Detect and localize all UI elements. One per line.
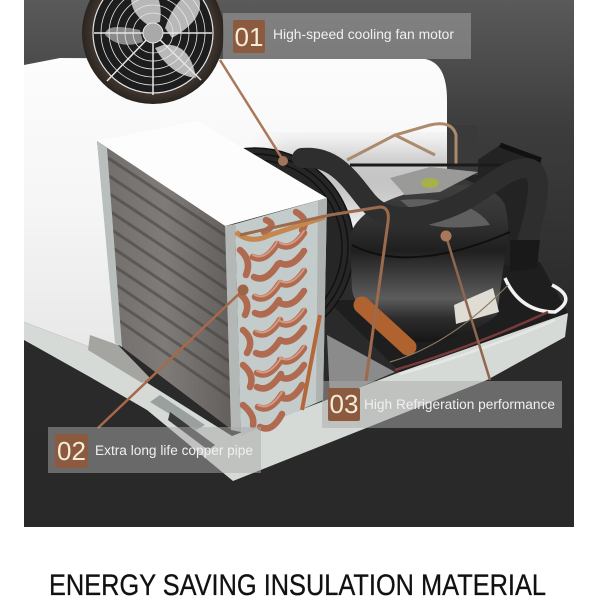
front frame bbox=[225, 224, 241, 432]
callout 03 bbox=[322, 381, 562, 428]
right side bracket and tubes bbox=[447, 125, 541, 265]
compressor bbox=[350, 167, 510, 342]
insulated suction pipe bbox=[302, 158, 538, 242]
pipe clamp bbox=[510, 240, 540, 272]
copper suction stub bbox=[362, 305, 408, 347]
compressor bay floor bbox=[327, 262, 568, 400]
label 03: High Refrigeration performance bbox=[364, 397, 555, 412]
brass liquid tube bbox=[236, 217, 325, 239]
condenser finned face bbox=[97, 141, 232, 430]
white refrigeration unit body bbox=[24, 58, 470, 347]
condenser top bbox=[97, 121, 327, 226]
label 02: Extra long life copper pipe bbox=[95, 443, 253, 458]
badge 02: 02 bbox=[57, 436, 86, 466]
fin stripes bbox=[108, 158, 231, 398]
copper hairpins bbox=[240, 212, 305, 428]
fan detail inset bbox=[82, 0, 224, 104]
wiring harness bbox=[390, 278, 566, 374]
badge 03: 03 bbox=[330, 389, 358, 419]
leader line 02 bbox=[98, 284, 248, 428]
fan blades bbox=[105, 0, 200, 78]
left frame bbox=[97, 141, 122, 347]
condenser unit bbox=[97, 121, 327, 436]
leader line 03 bbox=[440, 230, 490, 380]
right frame bbox=[316, 198, 327, 402]
hairpin highlights bbox=[253, 231, 304, 406]
callout 02 bbox=[48, 427, 261, 473]
copper tubing above compressor bbox=[347, 124, 530, 165]
badge 01: 01 bbox=[235, 22, 263, 52]
coil end plate bbox=[235, 198, 327, 436]
fan housing bbox=[82, 0, 224, 104]
copper discharge tube bbox=[240, 207, 388, 381]
condenser fan behind the coil bbox=[156, 148, 354, 346]
base tray bbox=[24, 313, 568, 481]
fan guard bbox=[93, 0, 213, 95]
callout 01 bbox=[223, 13, 471, 59]
label 01: High-speed cooling fan motor bbox=[273, 27, 455, 42]
leader line 01 bbox=[220, 60, 288, 166]
